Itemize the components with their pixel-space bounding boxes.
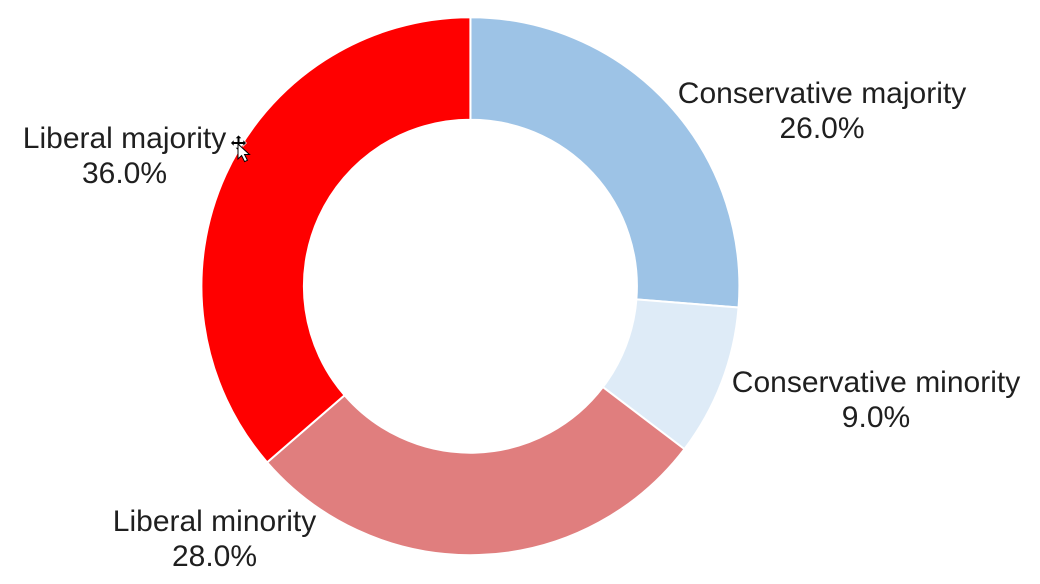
label: conservative minority: 9.0%	[842, 401, 910, 434]
segment: conservative majority	[470, 17, 739, 308]
label: conservative minority: Conservative minority	[732, 366, 1020, 399]
label: conservative majority: 26.0%	[779, 112, 865, 145]
icon: mouse cursor	[230, 135, 250, 162]
segment: liberal minority	[267, 387, 684, 555]
segment: conservative minority	[603, 299, 739, 449]
label: liberal majority: 36.0%	[82, 157, 167, 190]
label: liberal majority: Liberal majority	[23, 122, 226, 155]
label: conservative majority: Conservative majority	[678, 77, 966, 110]
label: liberal minority: Liberal minority	[113, 505, 316, 538]
label: liberal minority: 28.0%	[172, 540, 257, 573]
segment: liberal majority	[201, 17, 470, 462]
